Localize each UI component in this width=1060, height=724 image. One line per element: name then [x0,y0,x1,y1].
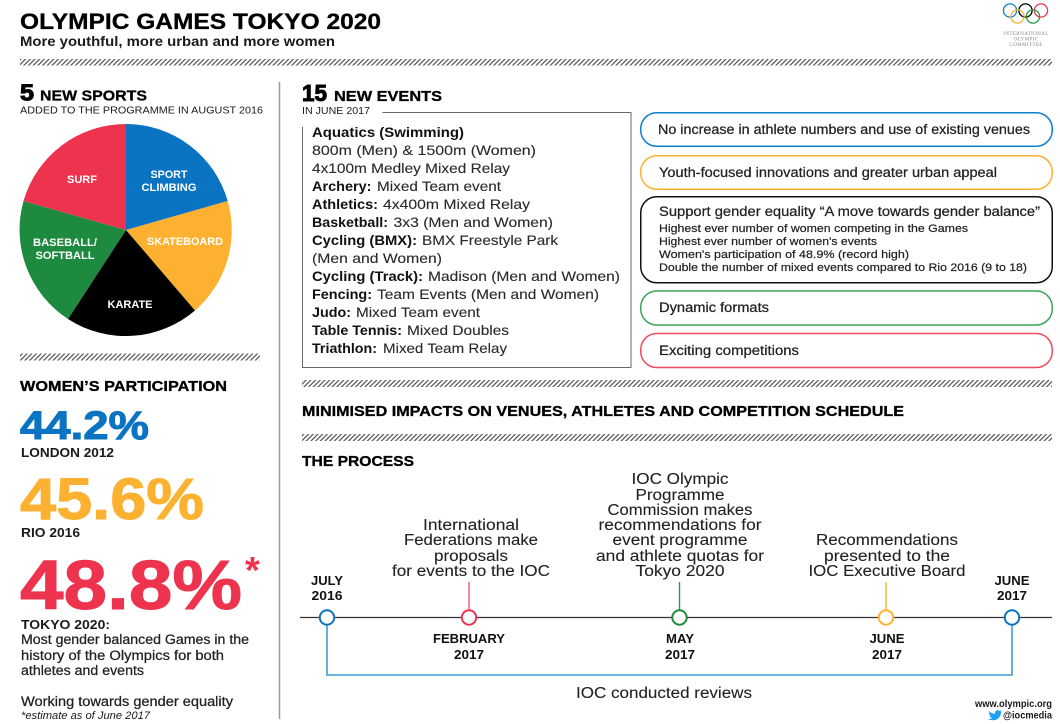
heading: minimised impacts: MINIMISED IMPACTS ON VENUES, ATHLETES AND COMPETITION SCHEDULE [302,404,904,420]
women's participation panel [20,379,260,722]
heading: the process: THE PROCESS [302,454,414,470]
milestone: June 2017 executive board: presented to the [824,548,950,565]
pill: gender equality: Highest ever number of women competing in the Games [659,223,969,235]
pill: exciting competitions [641,334,1052,368]
list text: Mixed Team event [356,304,480,320]
milestone: February 2017: Federations make [404,532,538,549]
list text: Mixed Doubles [407,322,509,338]
slice: surf [24,124,126,230]
stat: Tokyo 2020 [20,546,260,722]
15 new events heading: 15 [302,80,327,106]
list text: Mixed Team event [377,178,501,194]
footer credits [974,699,1052,722]
timeline axis [300,616,1052,618]
pill: youth-focused: Youth-focused innovations and greater urban appeal [659,165,997,180]
milestone: February 2017: 2017 [454,647,484,662]
milestone: May 2017: MAY [666,631,694,646]
stat: Tokyo 2020: TOKYO 2020: [21,617,110,632]
milestone: June 2017 executive board: JUNE [870,631,905,646]
stat: London 2012: LONDON 2012 [21,446,114,460]
list text: 4x400m Mixed Relay [383,196,530,212]
column divider [278,82,280,719]
milestone: June 2017 end: JUNE [994,573,1030,588]
list text: Table Tennis: [312,322,402,338]
heading: WOMEN’S PARTICIPATION [20,379,227,395]
slice: karate: KARATE [108,299,152,311]
milestone: February 2017: for events to the IOC [392,563,550,580]
pill: gender equality: Support gender equality “A move towards gender balance” [659,204,1040,219]
pill: gender equality: Highest ever number of women's events [659,236,878,248]
bracket label: IOC conducted reviews [576,685,752,702]
slice: baseball softball: SOFTBALL [36,250,95,262]
panel: principles pills [641,113,1052,368]
milestone: May 2017: IOC Olympic [632,471,729,488]
icon: twitter bird [988,710,1002,720]
list text [312,124,620,356]
list text: 4x100m Medley Mixed Relay [312,160,510,176]
slice: skateboard [126,201,232,310]
milestone: June 2017 executive board: Recommendations [816,532,958,549]
stat: Rio 2016: RIO 2016 [21,526,80,540]
logo wordmark: OLYMPIC [1014,36,1039,42]
pill: gender equality: Double the number of mixed events compared to Rio 2016 (9 to 18) [659,262,1027,274]
slice: skateboard: SKATEBOARD [147,236,223,248]
stat: Rio 2016: 45.6% [20,467,204,532]
stat: Tokyo 2020: athletes and events [21,663,144,678]
5 new sports heading [20,80,263,116]
milestone: June 2017 executive board [808,532,966,662]
stat: London 2012 [20,404,149,460]
list border [302,112,631,368]
footer credits: www.olympic.org [974,699,1052,710]
milestone: May 2017: event programme [612,532,748,549]
pill: gender equality [641,197,1052,283]
pill: no increase in athletes [641,113,1052,146]
footer credits: @iocmedia [1003,710,1052,722]
panel: new events list [302,112,631,368]
list text: BMX Freestyle Park [422,232,559,248]
slice: sport climbing [126,124,228,230]
5 new sports heading: NEW SPORTS [40,88,147,104]
milestone: May 2017: Commission makes [608,502,753,519]
pill: youth-focused [641,156,1052,189]
milestone: July 2016: JULY [311,573,343,588]
milestone: May 2017: recommendations for [598,517,762,534]
5 new sports heading: 5 [20,80,34,106]
milestone: May 2017: and athlete quotas for [596,548,764,565]
15 new events heading [302,80,442,117]
milestone: May 2017: Programme [636,487,724,504]
list text: Mixed Team Relay [383,340,507,356]
list text: 800m (Men) & 1500m (Women) [312,142,536,158]
icon: Olympic rings [1003,4,1048,23]
stat: Tokyo 2020: Most gender balanced Games in the [21,632,249,647]
stat: Tokyo 2020: history of the Olympics for both [21,648,224,663]
timeline [300,471,1052,702]
milestone: February 2017 [392,517,550,662]
list text: Archery: [312,178,372,194]
milestone: February 2017: International [423,517,519,534]
milestone: May 2017: 2017 [665,647,695,662]
list text: Cycling (BMX): [312,232,417,248]
list text: Cycling (Track): [312,268,423,284]
list text: Fencing: [312,286,372,302]
pie chart: five new sports [20,124,232,336]
milestone: May 2017: Tokyo 2020 [636,563,725,580]
stat: Tokyo 2020: 48.8% [20,546,242,624]
stat: London 2012: 44.2% [20,404,149,448]
slice: karate [68,230,195,336]
list text: Team Events (Men and Women) [377,286,599,302]
list text: Triathlon: [312,340,377,356]
list text: 3x3 (Men and Women) [394,214,553,230]
list text: Judo: [312,304,351,320]
milestone: February 2017: FEBRUARY [433,631,505,646]
milestone: June 2017 executive board: 2017 [872,647,902,662]
milestone: June 2017 executive board: IOC Executive Board [808,563,966,580]
list text: Basketball: [312,214,388,230]
list text: Madison (Men and Women) [428,268,620,284]
stat: Tokyo 2020: Working towards gender equality [21,694,233,709]
pill: exciting competitions: Exciting competitions [659,343,799,358]
logo wordmark: INTERNATIONAL [1003,31,1049,37]
milestone: July 2016 [311,573,343,625]
milestone: May 2017 [596,471,764,662]
pill: dynamic formats [641,291,1052,325]
slice: sport climbing: CLIMBING [142,182,196,194]
stat: Tokyo 2020: *estimate as of June 2017 [21,710,151,722]
milestone: February 2017: proposals [434,548,508,565]
logo wordmark [1003,31,1049,48]
IOC logo [1003,4,1049,48]
milestone: June 2017 end [994,573,1030,625]
slice: surf: SURF [67,174,97,186]
slice: baseball softball [20,201,126,319]
slice: sport climbing: SPORT [150,169,188,181]
list text: Athletics: [312,196,378,212]
review bracket [327,625,1012,675]
milestone: July 2016: 2016 [312,588,342,603]
15 new events heading: NEW EVENTS [334,88,442,105]
list text: (Men and Women) [312,250,442,266]
stat: Tokyo 2020: * [245,550,260,592]
pill: dynamic formats: Dynamic formats [659,300,769,315]
slice: baseball softball: BASEBALL/ [33,237,97,249]
subtitle: More youthful, more urban and more women [20,33,335,49]
pill: no increase in athletes: No increase in athlete numbers and use of existing venues [658,122,1030,137]
title: OLYMPIC GAMES TOKYO 2020 [20,9,381,34]
logo wordmark: COMMITTEE [1009,42,1043,48]
5 new sports heading: ADDED TO THE PROGRAMME IN AUGUST 2016 [20,104,263,116]
pill: gender equality: Women's participation of 48.9% (record high) [659,249,909,261]
milestone: June 2017 end: 2017 [997,588,1027,603]
list text: Aquatics (Swimming) [312,124,464,140]
15 new events heading: IN JUNE 2017 [302,105,370,117]
